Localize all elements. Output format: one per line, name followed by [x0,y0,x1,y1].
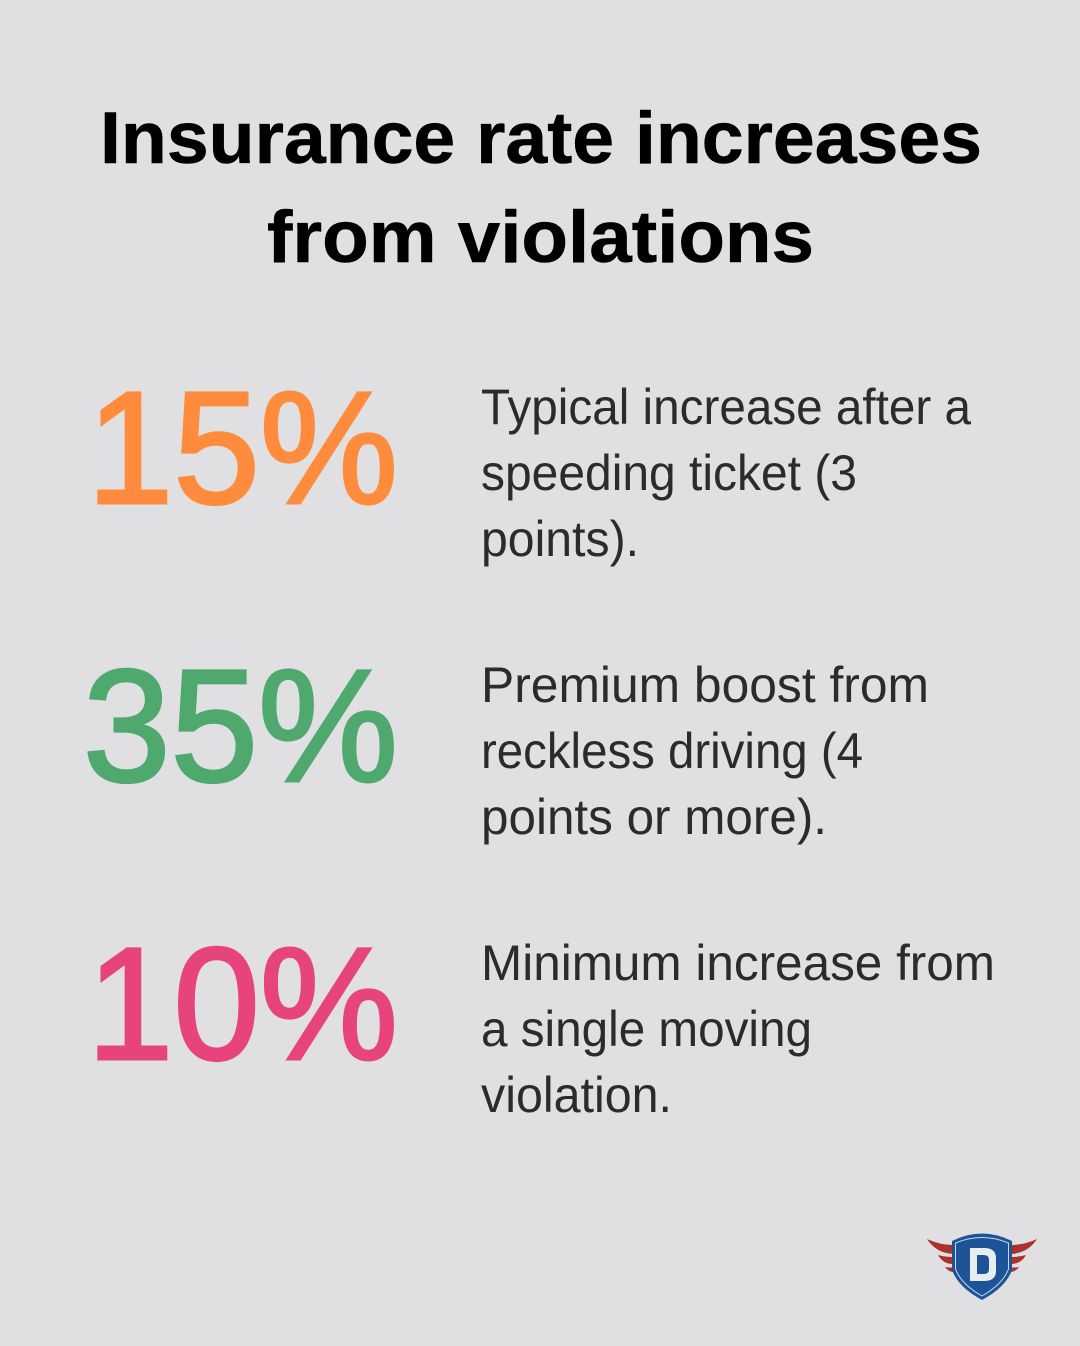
description: reckless driving: Premium boost from [481,657,929,713]
description: speeding ticket: points). [481,511,639,567]
title [100,98,982,278]
description: moving violation: Minimum increase from [481,935,995,991]
description: moving violation: violation. [481,1067,672,1123]
description: moving violation [481,935,995,1123]
description: reckless driving [481,657,929,845]
description: speeding ticket: speeding ticket (3 [481,445,857,501]
description: speeding ticket [481,379,971,567]
title: from violations [267,197,814,278]
stat: 15% [87,358,971,567]
description: moving violation: a single moving [481,1001,812,1057]
description: reckless driving: points or more). [481,789,827,845]
stat: 10% [87,914,995,1123]
description: reckless driving: reckless driving (4 [481,723,863,779]
number: 35%: 35% [83,636,398,815]
description: speeding ticket: Typical increase after a [481,379,971,435]
number: 15%: 15% [87,358,398,537]
icon: winged shield logo [927,1234,1037,1300]
title: Insurance rate increases [100,98,982,179]
stat: 35% [83,636,929,845]
number: 10%: 10% [87,914,398,1093]
